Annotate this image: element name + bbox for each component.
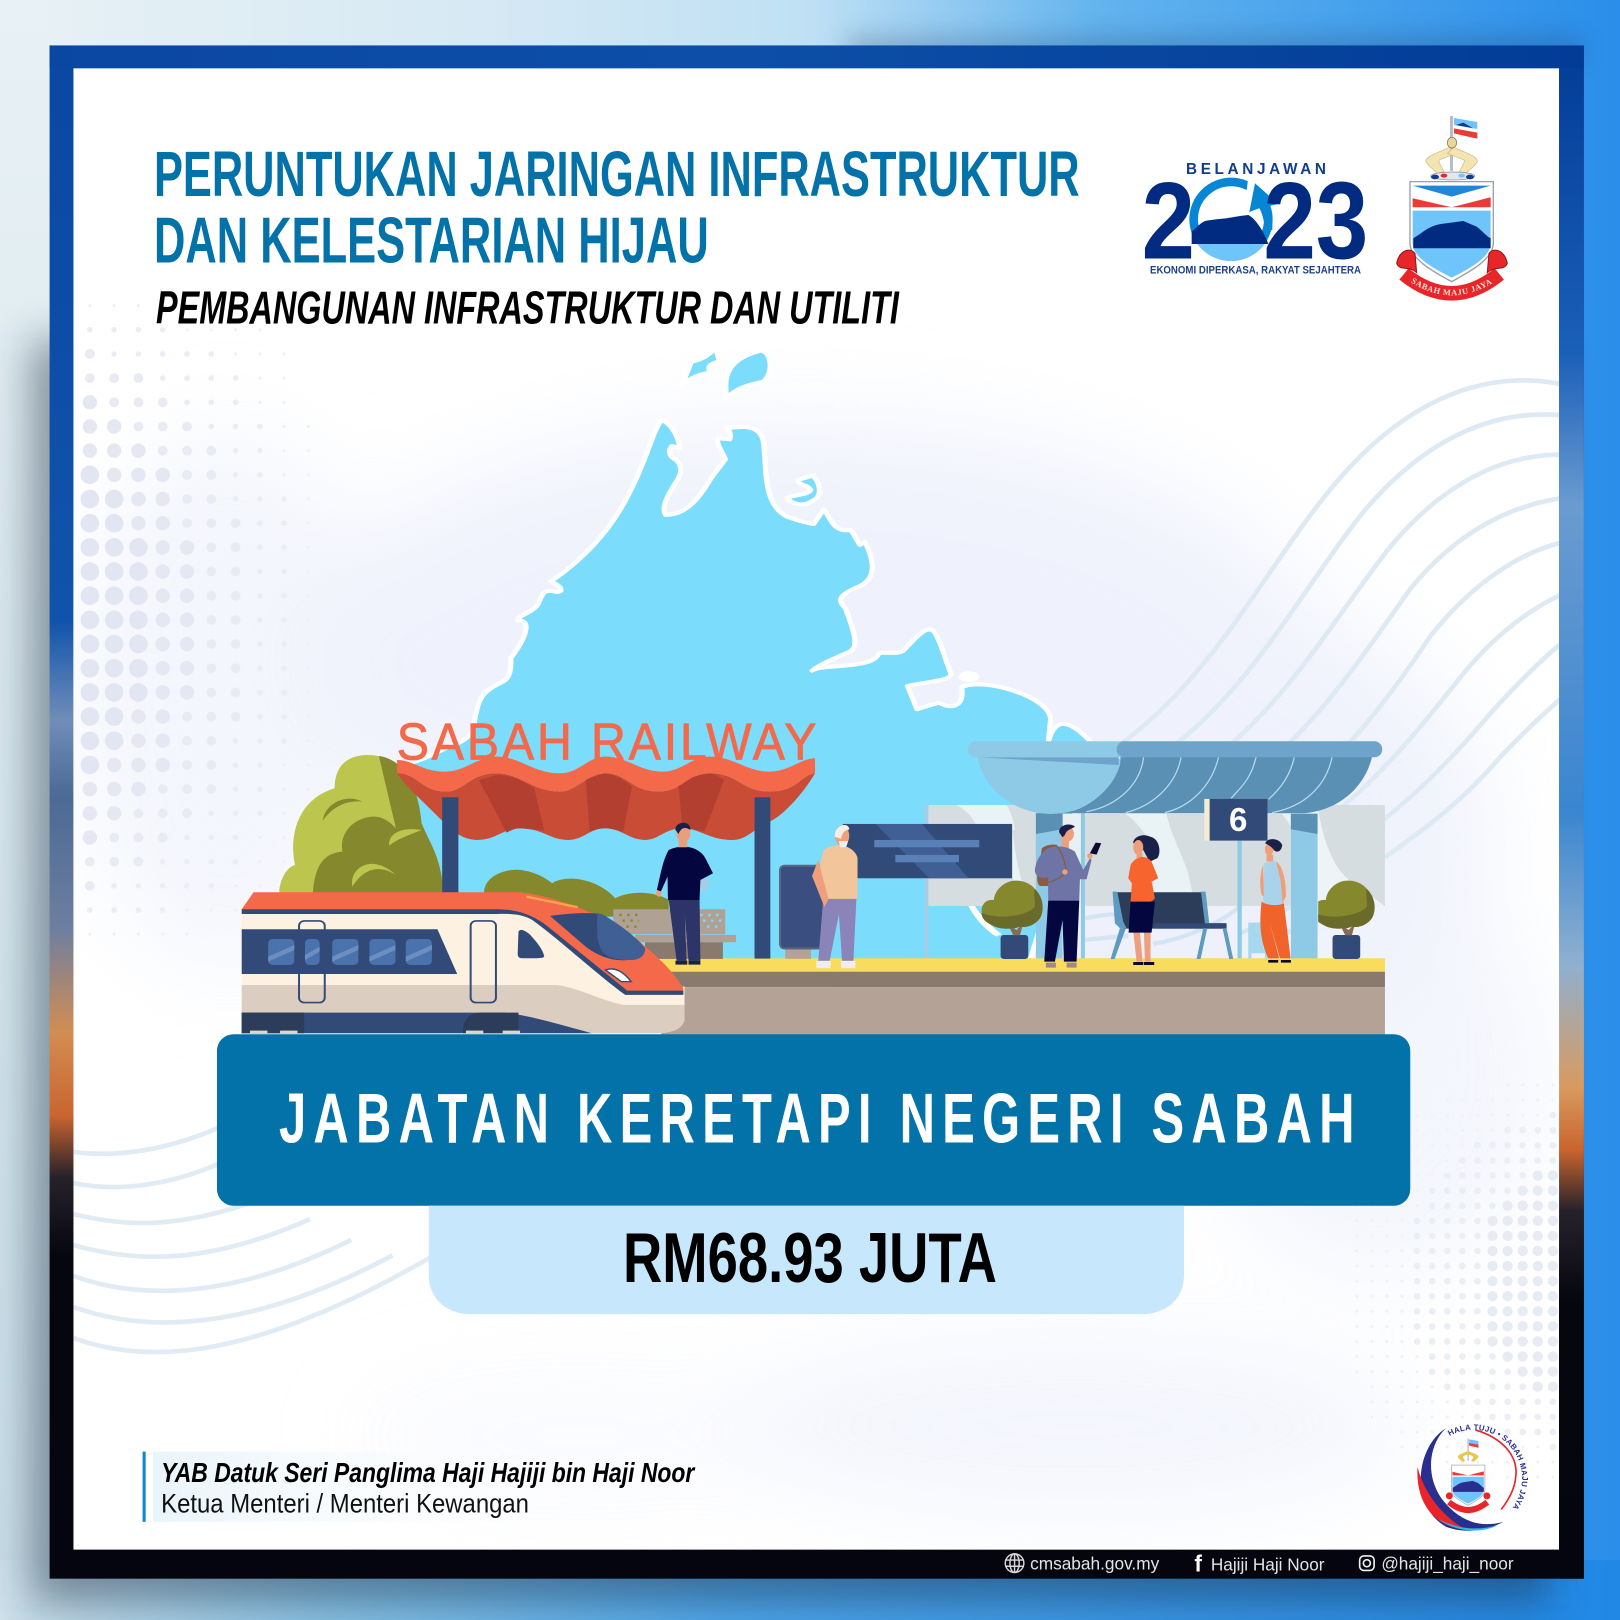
awning lower panel (397, 773, 815, 840)
footer social links: @hajiji_haji_noor (1381, 1553, 1514, 1574)
attribution: YAB Datuk Seri Panglima Haji Hajiji bin Haji Noor (161, 1457, 696, 1488)
icon: instagram (1360, 1556, 1374, 1570)
halftone dots left (90, 306, 308, 935)
woman in orange (1128, 835, 1159, 965)
title (154, 138, 1080, 276)
station left: shelter, train and people (242, 755, 815, 1033)
logo: Hala Tuju Sabah Maju Jaya (1417, 1424, 1528, 1531)
man with phone (1035, 825, 1101, 968)
old man (812, 825, 858, 968)
station walls and columns (925, 805, 1385, 959)
advert board (780, 866, 823, 959)
sign: Sabah Railway: SABAH RAILWAY (397, 712, 819, 770)
logo: Belanjawan 2023: 2 (1142, 159, 1195, 282)
logo: Sabah crest (1396, 116, 1508, 301)
map of Sabah (397, 347, 1090, 961)
wall panel left (928, 805, 1036, 937)
footer social links (1005, 1550, 1514, 1576)
title: PERUNTUKAN JARINGAN INFRASTRUKTUR (154, 138, 1080, 210)
tree (279, 755, 443, 893)
platform number sign (1204, 799, 1267, 959)
back hedge (484, 870, 669, 917)
soft cloud background (72, 424, 1550, 1519)
footer social links: f (1194, 1550, 1202, 1576)
information board (843, 824, 1012, 878)
canopy roof (968, 741, 1382, 814)
icon: globe (1005, 1554, 1024, 1572)
train (242, 892, 685, 1033)
attribution (143, 1452, 696, 1522)
logo: Belanjawan 2023 (1144, 163, 1365, 276)
bench (1111, 892, 1233, 959)
woman in blue top (1260, 839, 1291, 963)
footer social links: cmsabah.gov.my (1030, 1553, 1159, 1573)
attribution: Ketua Menteri / Menteri Kewangan (161, 1489, 529, 1519)
station canopy and board (843, 741, 1382, 959)
wave lines top right (1121, 380, 1562, 858)
wave lines bottom left (73, 1126, 434, 1352)
awning top strip (397, 757, 815, 792)
halftone dots right (1357, 1085, 1553, 1478)
amount panel (429, 1206, 1184, 1314)
title: DAN KELESTARIAN HIJAU (154, 203, 709, 276)
logo: Belanjawan 2023: BELANJAWAN (1186, 161, 1326, 178)
logo: Belanjawan 2023: EKONOMI DIPERKASA, RAKYAT SEJAHTERA (1150, 265, 1361, 277)
station number: 6 (1229, 802, 1247, 839)
subtitle: PEMBANGUNAN INFRASTRUKTUR DAN UTILITI (156, 281, 900, 333)
logo: Sabah crest: SABAH MAJU JAYA (1411, 278, 1492, 296)
small chair (1248, 923, 1268, 959)
footer social links: Hajiji Haji Noor (1211, 1554, 1325, 1574)
name band (217, 1034, 1410, 1206)
logo: Belanjawan 2023: 23 (1263, 159, 1368, 282)
wall panel right (1318, 805, 1385, 906)
potted plant left (982, 881, 1043, 959)
logo: Hala Tuju Sabah Maju Jaya: HALA TUJU • SABAH MAJU JAYA (1448, 1424, 1528, 1509)
platform (661, 958, 1385, 1035)
poles and columns (925, 805, 1318, 959)
platform bench (613, 909, 736, 959)
man in navy jacket (656, 823, 713, 965)
wall panel centre (1063, 814, 1291, 906)
awning posts (442, 797, 770, 959)
station figures, bench and plants (982, 825, 1375, 968)
potted plant right (1314, 881, 1375, 959)
glass lower area (1063, 906, 1291, 959)
amount panel: RM68.93 JUTA (623, 1218, 997, 1297)
